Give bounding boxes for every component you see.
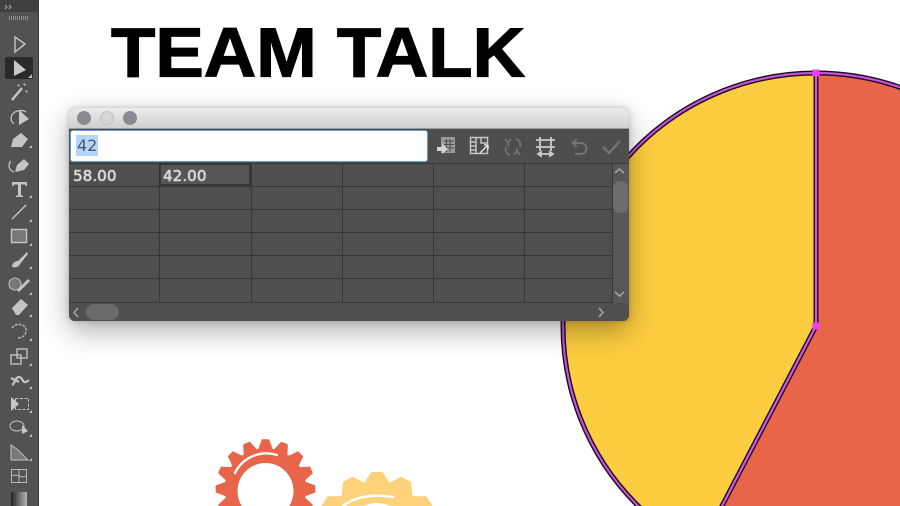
tool: lasso [11, 110, 29, 125]
window button: zoom [123, 111, 137, 125]
table grid and toolbar icons [69, 136, 629, 321]
icon: switch x y [505, 139, 520, 155]
tool: shaper [9, 278, 29, 291]
tool: mesh [12, 470, 26, 482]
anchor point: centre [812, 322, 820, 330]
icon: red gear [216, 439, 316, 506]
tool: direct selection [5, 57, 33, 79]
icon: cell style [536, 137, 555, 156]
tool group corner markers [29, 145, 32, 461]
icon: transpose [470, 138, 488, 154]
pie slice: yellow 42 percent [564, 73, 816, 506]
cell value: 58.00 [73, 167, 116, 185]
window button: close [77, 111, 91, 125]
tool: perspective grid [11, 445, 28, 460]
anchor point: top [812, 70, 820, 76]
tool: scale [11, 349, 27, 364]
selected cell [160, 164, 250, 185]
window title bar [69, 108, 629, 129]
tool: line [12, 205, 26, 219]
icon: revert [572, 139, 586, 154]
icon: import data [437, 137, 455, 154]
tool: selection [15, 37, 25, 52]
pie chart [560, 70, 900, 506]
tool: paintbrush [12, 252, 28, 267]
tool: free transform [11, 397, 28, 411]
tool: warp [11, 377, 29, 385]
tool: rotate [12, 324, 26, 338]
selection outline [563, 73, 900, 506]
icon: yellow gear [322, 472, 432, 506]
window button: minimise [100, 111, 114, 125]
vertical scrollbar [613, 164, 629, 303]
pie slice: red 58 percent [699, 73, 900, 506]
tool: rectangle [12, 230, 26, 242]
tool: gradient [11, 492, 27, 506]
value input [70, 130, 428, 162]
value input: 42 [77, 136, 97, 155]
tool: shape builder [10, 421, 28, 434]
tool: eraser [12, 299, 28, 315]
data window [69, 108, 629, 321]
tool: type [12, 182, 27, 197]
selected cell value: 42.00 [163, 167, 206, 185]
title: TEAM TALK [111, 14, 525, 92]
horizontal scrollbar [69, 303, 629, 321]
icon: apply check [603, 141, 620, 153]
tool: curvature [9, 159, 29, 172]
tools panel [0, 0, 39, 506]
tool: magic wand [12, 84, 27, 100]
tool: pen [11, 133, 28, 147]
